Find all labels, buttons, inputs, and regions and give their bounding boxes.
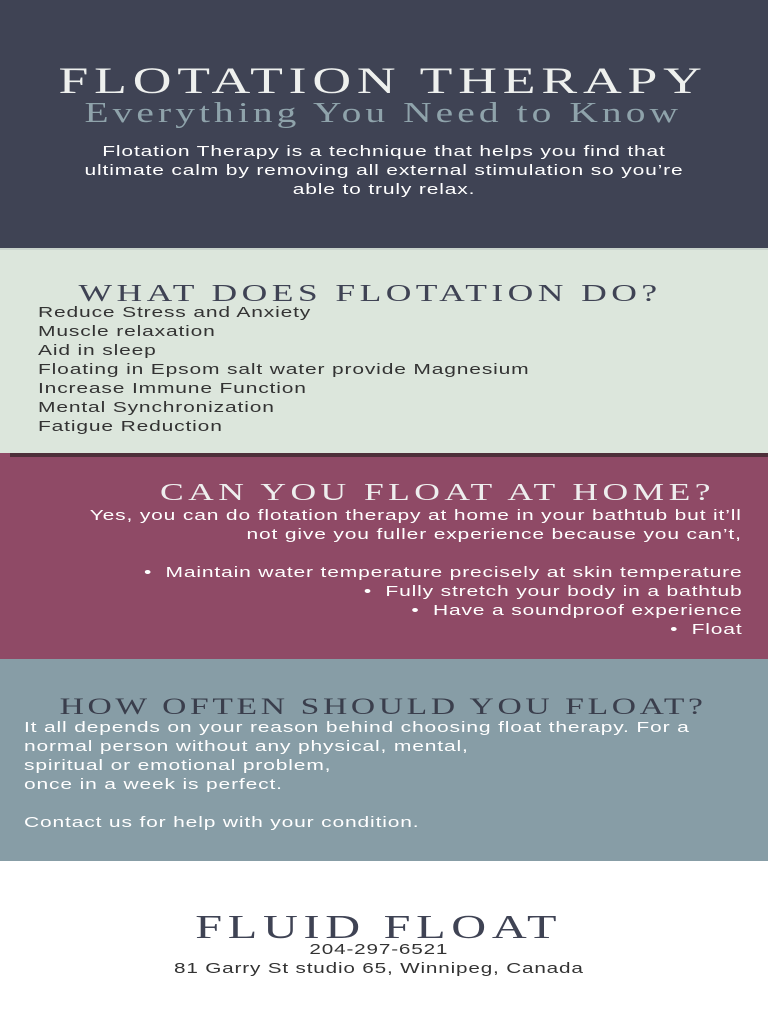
benefits list: Increase Immune Function	[38, 380, 307, 397]
home text: Yes, you can do flotation therapy at home in your bathtub but it’ll	[90, 507, 742, 524]
benefits list	[38, 304, 530, 435]
intro text: ultimate calm by removing all external stimulation so you’re	[85, 162, 683, 179]
brand name: FLUID FLOAT	[195, 909, 562, 946]
bullet list: • Float	[670, 621, 742, 638]
benefits list: Floating in Epsom salt water provide Magnesium	[38, 361, 530, 378]
benefits list: Aid in sleep	[38, 342, 157, 359]
intro text: able to truly relax.	[293, 181, 475, 198]
frequency text	[24, 719, 690, 831]
bullet list: • Maintain water temperature precisely at skin temperature	[144, 564, 742, 581]
title: FLOTATION THERAPY	[58, 61, 708, 102]
frequency text: normal person without any physical, mental,	[24, 738, 469, 755]
heading: WHAT DOES FLOTATION DO?	[79, 281, 662, 307]
contact info	[174, 941, 584, 977]
frequency text: Contact us for help with your condition.	[24, 814, 419, 831]
frequency text: It all depends on your reason behind choosing float therapy. For a	[24, 719, 690, 736]
bullet list: • Have a soundproof experience	[411, 602, 742, 619]
contact info: 204-297-6521	[309, 941, 448, 958]
contact info: 81 Garry St studio 65, Winnipeg, Canada	[174, 960, 584, 977]
benefits list: Muscle relaxation	[38, 323, 216, 340]
bullet list: • Fully stretch your body in a bathtub	[363, 583, 742, 600]
home text: not give you fuller experience because you can’t,	[247, 526, 742, 543]
frequency text: spiritual or emotional problem,	[24, 757, 331, 774]
benefits list: Mental Synchronization	[38, 399, 275, 416]
subtitle: Everything You Need to Know	[84, 97, 682, 129]
panel: what does flotation do	[0, 248, 768, 453]
panel: footer contact	[0, 861, 768, 1024]
heading: HOW OFTEN SHOULD YOU FLOAT?	[60, 694, 707, 719]
intro text: Flotation Therapy is a technique that helps you find that	[102, 143, 666, 160]
bullet list	[144, 564, 742, 638]
heading: CAN YOU FLOAT AT HOME?	[160, 480, 715, 506]
home text	[90, 507, 742, 543]
panel: can you float at home	[0, 453, 768, 659]
benefits list: Fatigue Reduction	[38, 418, 223, 435]
frequency text: once in a week is perfect.	[24, 776, 283, 793]
panel: how often	[0, 659, 768, 861]
benefits list: Reduce Stress and Anxiety	[38, 304, 311, 321]
intro text	[85, 143, 683, 198]
panel: header	[0, 0, 768, 248]
